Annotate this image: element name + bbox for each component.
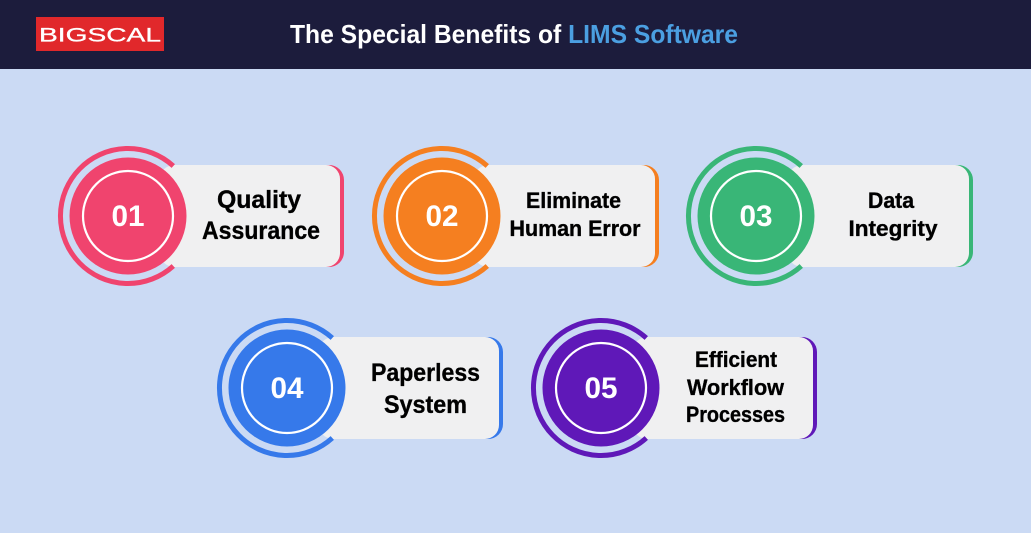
benefit 02: Eliminate Human Error: 02	[426, 200, 458, 233]
title: The Special Benefits of LIMS Software	[290, 19, 738, 49]
benefit 05: Efficient Workflow Processes	[533, 320, 817, 456]
benefit 03: Data Integrity: Integrity	[848, 216, 938, 241]
benefit 04: Paperless System	[219, 320, 503, 456]
benefit 05: Efficient Workflow Processes: Efficient	[695, 347, 778, 372]
benefit 04: Paperless System: System	[384, 391, 467, 419]
benefit 02: Eliminate Human Error	[374, 148, 659, 284]
benefit 01: Quality Assurance	[60, 148, 344, 284]
logo: Bigscal: BIGSCAL	[39, 24, 161, 46]
benefit 01: Quality Assurance: 01	[112, 200, 144, 233]
benefit 04: Paperless System: 04	[270, 372, 304, 405]
benefit 03: Data Integrity: Data	[868, 188, 915, 213]
benefit 02: Eliminate Human Error: Human Error	[510, 216, 641, 241]
benefit 05: Efficient Workflow Processes: Workflow	[687, 375, 785, 400]
benefit 03: Data Integrity: 03	[740, 200, 772, 233]
benefit 01: Quality Assurance: Quality	[217, 186, 301, 214]
benefit 03: Data Integrity	[688, 148, 973, 284]
benefit 05: Efficient Workflow Processes: 05	[584, 372, 618, 405]
logo: Bigscal	[36, 17, 164, 51]
benefit 01: Quality Assurance: Assurance	[202, 217, 320, 245]
benefit 05: Efficient Workflow Processes: Processes	[686, 402, 785, 427]
benefit 02: Eliminate Human Error: Eliminate	[526, 188, 621, 213]
benefit 04: Paperless System: Paperless	[371, 359, 480, 387]
header bar	[0, 0, 1031, 69]
